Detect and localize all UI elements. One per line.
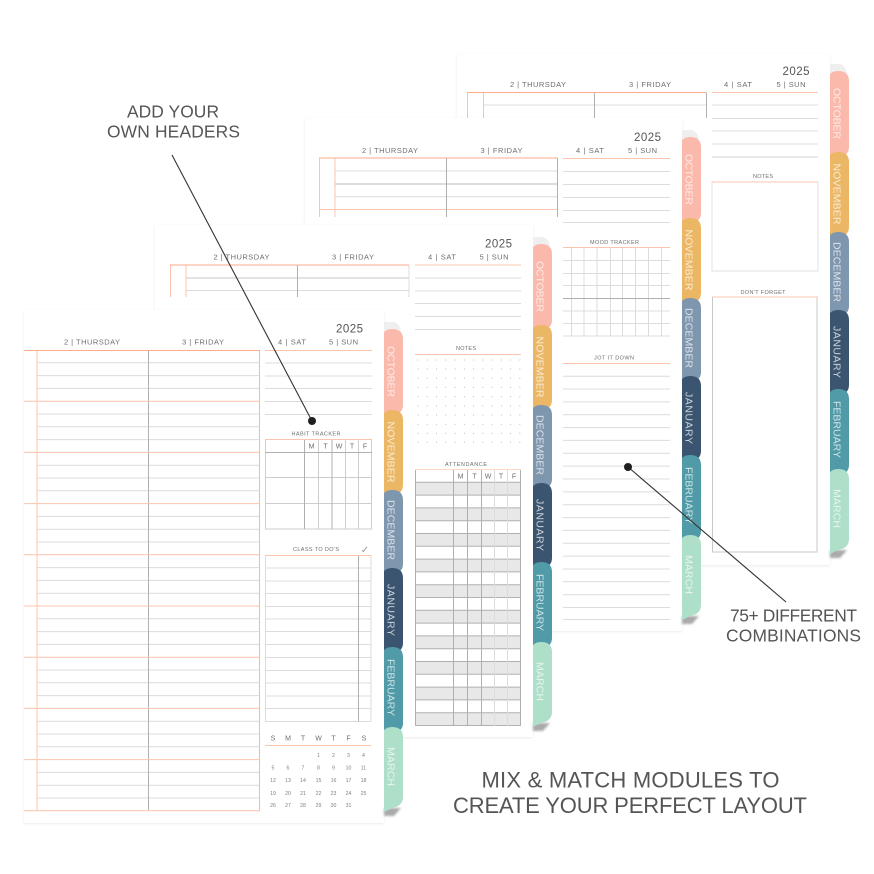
month tabs: JANUARY — [384, 584, 396, 636]
month tabs: MARCH — [830, 489, 842, 528]
day headers — [214, 252, 508, 262]
day headers: 2 | THURSDAY — [510, 80, 566, 89]
mini calendar: T — [301, 736, 306, 742]
mini calendar: 20 — [285, 791, 291, 797]
habit tracker table: T — [323, 444, 328, 450]
habit tracker table: M — [309, 444, 315, 450]
mini calendar: 3 — [347, 753, 350, 759]
mini calendar: 18 — [361, 778, 366, 784]
year: 2025 — [485, 238, 512, 250]
planner page 1 (front) — [24, 310, 403, 823]
day headers: 3 | FRIDAY — [629, 80, 671, 89]
month tabs: DECEMBER — [830, 242, 842, 302]
day headers: 3 | FRIDAY — [480, 146, 522, 155]
month tabs: FEBRUARY — [534, 574, 546, 631]
mini calendar: 1 — [317, 753, 320, 759]
don't forget box — [712, 290, 817, 552]
month tabs — [830, 64, 849, 558]
planner page 3 — [305, 118, 701, 631]
jot it down lines — [563, 356, 670, 620]
schedule grid — [467, 92, 706, 118]
mini calendar: 14 — [300, 778, 306, 784]
mini calendar: 21 — [300, 791, 306, 797]
mini calendar: 16 — [331, 778, 336, 784]
month tabs: MARCH — [534, 662, 546, 701]
mini calendar: 31 — [346, 803, 351, 809]
side lines — [415, 265, 521, 330]
mini calendar: F — [346, 736, 351, 742]
month tabs: JANUARY — [534, 499, 546, 551]
month tabs: NOVEMBER — [534, 336, 546, 398]
day headers: 3 | FRIDAY — [182, 338, 224, 346]
page sheet — [457, 54, 830, 565]
habit tracker table — [265, 432, 372, 529]
month tabs: NOVEMBER — [384, 422, 396, 483]
notes dot grid — [415, 346, 522, 442]
month tabs: JANUARY — [830, 326, 842, 378]
day headers: 5 | SUN — [628, 146, 657, 155]
mini calendar: 12 — [270, 778, 276, 784]
day headers — [510, 80, 806, 89]
mini calendar: 9 — [332, 766, 335, 772]
month tabs: MARCH — [682, 555, 694, 594]
page sheet — [305, 118, 682, 631]
callout: add your own headers: OWN HEADERS — [107, 122, 240, 142]
year: 2025 — [336, 324, 363, 336]
day headers: 4 | SAT — [278, 338, 306, 346]
mini calendar: 15 — [316, 778, 321, 784]
schedule grid — [319, 158, 558, 217]
mini calendar: 26 — [270, 803, 276, 809]
attendance table: T — [472, 474, 477, 480]
mini calendar: 2 — [332, 753, 335, 759]
attendance table: M — [458, 474, 464, 480]
mini calendar: 23 — [331, 791, 336, 797]
year: 2025 — [782, 66, 810, 78]
callout: 75+ different combinations — [726, 606, 861, 646]
side lines — [712, 92, 818, 157]
day headers: 5 | SUN — [776, 80, 806, 89]
mini calendar: S — [271, 736, 276, 742]
habit tracker table: W — [336, 444, 343, 450]
month tabs: FEBRUARY — [830, 401, 842, 458]
year: 2025 — [634, 132, 661, 144]
month tabs: DECEMBER — [682, 308, 694, 368]
month tabs — [682, 130, 701, 624]
day headers: 2 | THURSDAY — [362, 146, 418, 155]
attendance table: W — [485, 474, 492, 480]
don't forget box: DON'T FORGET — [740, 290, 786, 296]
mini calendar: 22 — [316, 791, 321, 797]
mini calendar — [265, 736, 371, 809]
month tabs: FEBRUARY — [682, 467, 694, 524]
mini calendar: 6 — [287, 766, 290, 772]
arrow: headers pointer — [172, 155, 316, 425]
side lines — [265, 350, 372, 414]
callout: add your own headers: ADD YOUR — [127, 102, 219, 122]
month tabs — [384, 322, 403, 816]
day headers: 4 | SAT — [428, 252, 456, 262]
mini calendar: 27 — [285, 803, 291, 809]
callout: 75+ different combinations: 75+ DIFFERENT — [730, 606, 857, 626]
mini calendar: 28 — [300, 803, 306, 809]
planner page 4 (back) — [457, 54, 849, 565]
habit tracker table: HABIT TRACKER — [292, 432, 341, 438]
day headers: 5 | SUN — [329, 338, 358, 346]
attendance table: ATTENDANCE — [445, 462, 487, 468]
mini calendar: 24 — [346, 791, 351, 797]
day headers: 4 | SAT — [724, 80, 752, 89]
month tabs: JANUARY — [682, 392, 694, 444]
mini calendar: 13 — [285, 778, 291, 784]
tagline: CREATE YOUR PERFECT LAYOUT — [453, 793, 807, 818]
mini calendar: 11 — [361, 766, 366, 772]
callout: 75+ different combinations: COMBINATIONS — [726, 626, 861, 646]
jot it down lines: JOT IT DOWN — [594, 356, 634, 362]
class to-do table — [265, 545, 371, 722]
habit tracker table: T — [350, 444, 355, 450]
mini calendar: 29 — [316, 803, 321, 809]
tagline — [453, 767, 807, 818]
tagline: MIX & MATCH MODULES TO — [482, 767, 780, 792]
mini calendar: 17 — [346, 778, 351, 784]
mini calendar: T — [331, 736, 336, 742]
mini calendar: W — [315, 736, 322, 742]
notes box: NOTES — [753, 174, 773, 180]
month tabs — [533, 237, 552, 731]
schedule grid — [170, 265, 409, 297]
day headers — [64, 338, 358, 346]
schedule grid — [24, 350, 260, 811]
mini calendar: 4 — [362, 753, 365, 759]
class to-do table: CLASS TO DO'S — [293, 547, 339, 553]
notes box — [712, 174, 818, 271]
mini calendar: S — [362, 736, 367, 742]
mini calendar: 5 — [272, 766, 275, 772]
month tabs: OCTOBER — [682, 154, 694, 205]
page sheet — [24, 310, 384, 823]
side lines — [563, 158, 670, 222]
day headers: 2 | THURSDAY — [214, 252, 270, 262]
day headers: 3 | FRIDAY — [332, 252, 374, 262]
month tabs: MARCH — [384, 747, 396, 786]
day headers: 4 | SAT — [576, 146, 604, 155]
mini calendar: 19 — [270, 791, 276, 797]
habit tracker table: F — [363, 444, 367, 450]
mini calendar: 10 — [346, 766, 351, 772]
planner page 2 — [155, 225, 552, 737]
attendance table: F — [512, 474, 516, 480]
mood tracker grid — [563, 240, 670, 336]
mini calendar: 8 — [317, 766, 320, 772]
month tabs: NOVEMBER — [682, 230, 694, 291]
mood tracker grid: MOOD TRACKER — [590, 240, 639, 246]
month tabs: OCTOBER — [830, 88, 842, 139]
mini calendar: 30 — [331, 803, 336, 809]
class to-do table: ✓ — [361, 545, 369, 556]
notes dot grid: NOTES — [456, 346, 476, 352]
attendance table — [415, 462, 521, 726]
month tabs: OCTOBER — [534, 261, 546, 312]
day headers: 5 | SUN — [480, 252, 508, 262]
month tabs: DECEMBER — [384, 500, 396, 560]
month tabs: FEBRUARY — [384, 659, 396, 716]
day headers — [362, 146, 657, 155]
callout: add your own headers — [107, 102, 240, 142]
mini calendar: M — [285, 736, 291, 742]
arrow: combinations pointer — [624, 463, 786, 602]
page sheet — [155, 225, 533, 737]
month tabs: NOVEMBER — [830, 164, 842, 225]
month tabs: DECEMBER — [534, 415, 546, 475]
mini calendar: 7 — [302, 766, 305, 772]
mini calendar: 25 — [361, 791, 366, 797]
day headers: 2 | THURSDAY — [64, 338, 120, 346]
attendance table: T — [499, 474, 504, 480]
month tabs: OCTOBER — [384, 346, 396, 397]
